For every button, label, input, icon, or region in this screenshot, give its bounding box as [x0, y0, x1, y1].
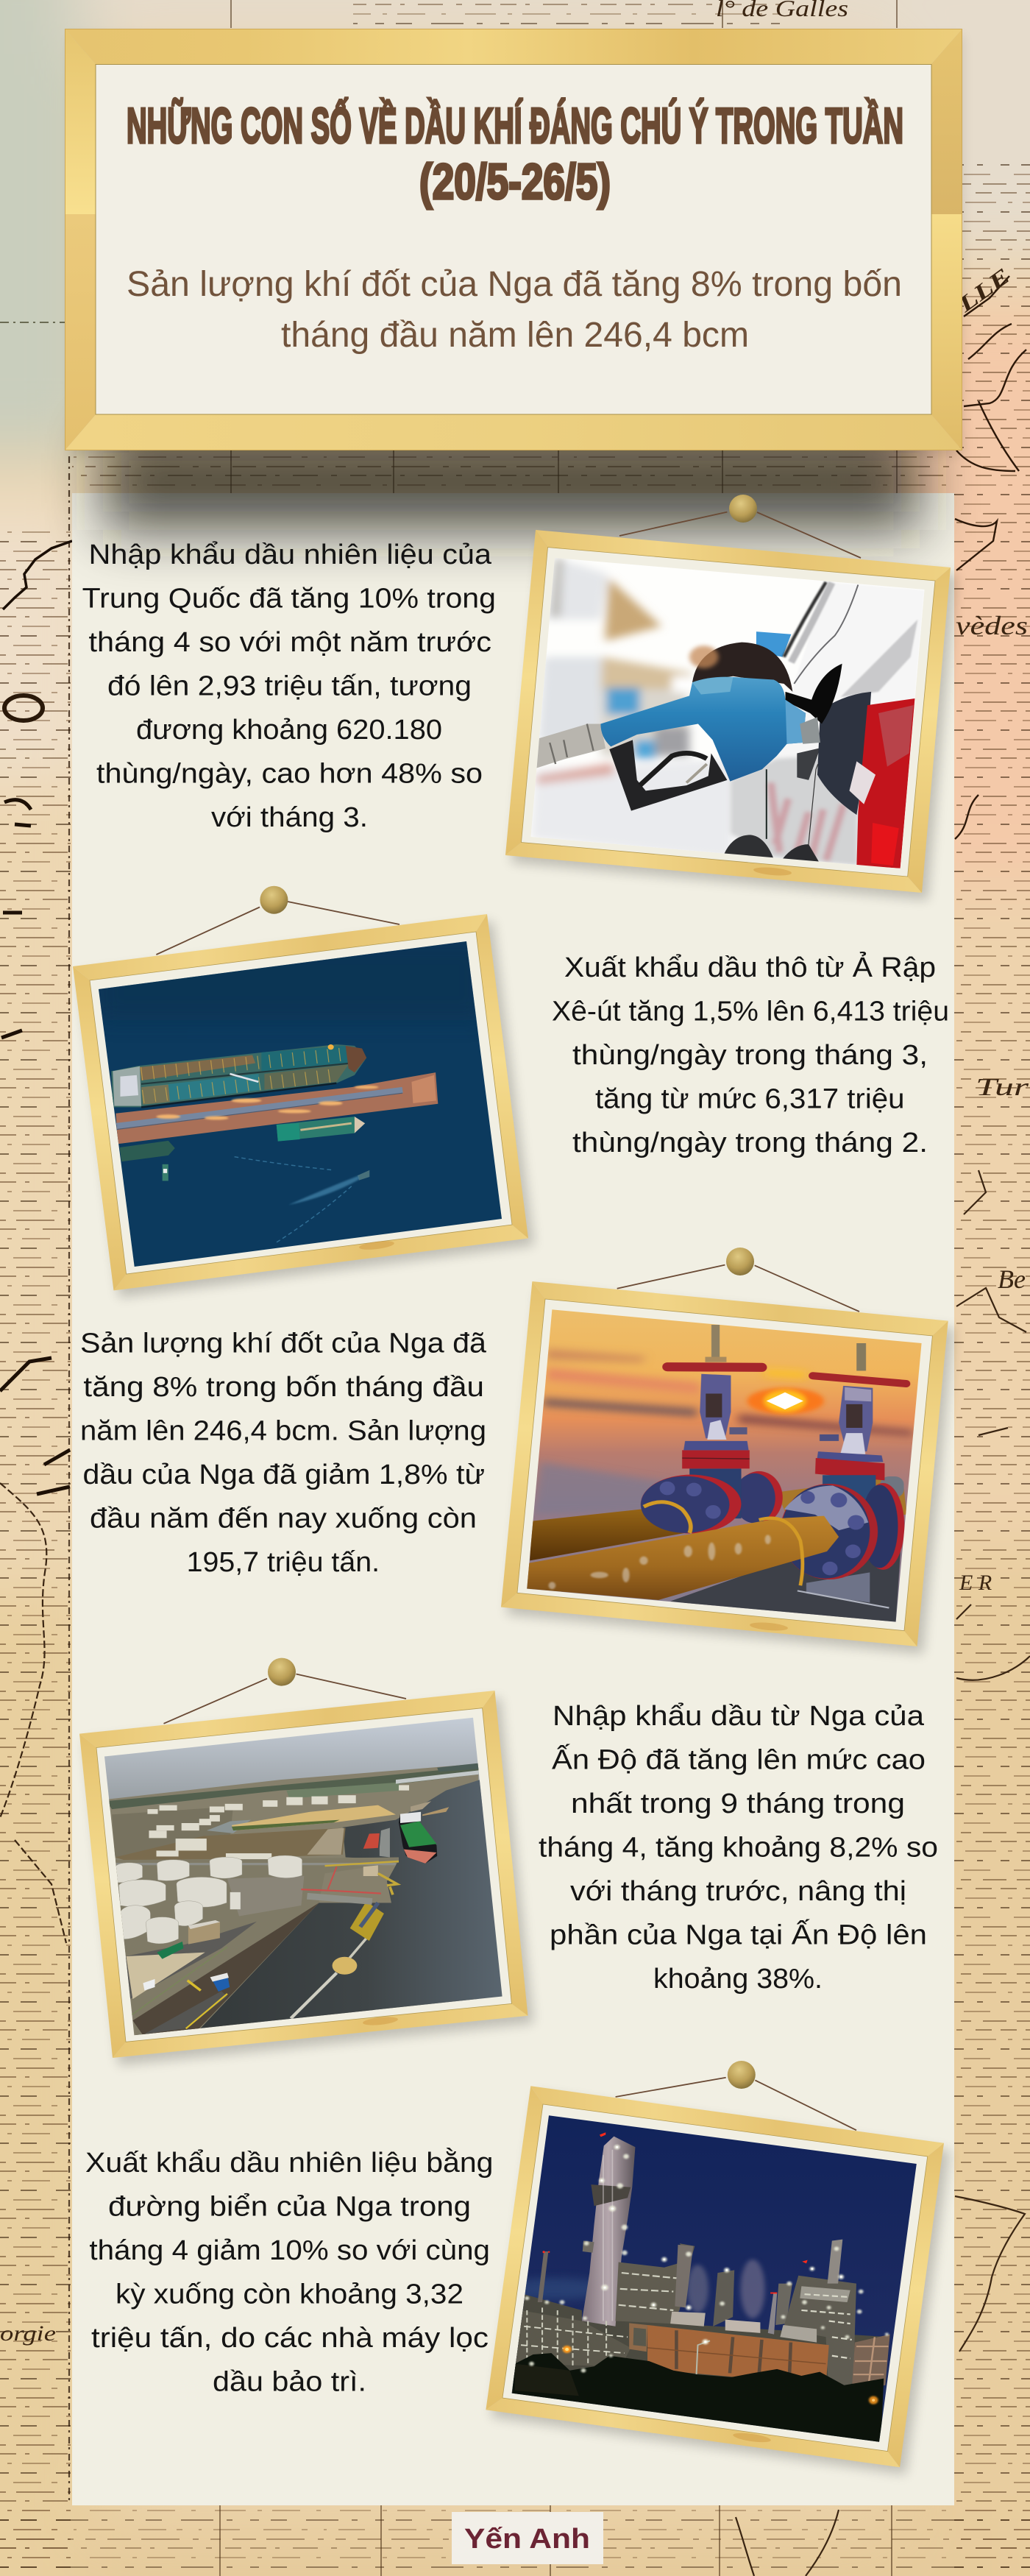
text block 3: Russia gas output: tăng 8% trong bốn tháng đầu	[83, 1372, 484, 1403]
hanging string	[163, 1674, 406, 1724]
title	[127, 97, 903, 210]
text block 4: India imports from Russia: Ấn Độ đã tăng lên mức cao	[552, 1743, 926, 1775]
text block 3: Russia gas output: đầu năm đến nay xuống còn	[90, 1503, 477, 1534]
picture 3: gas pipeline valves at sunset	[501, 1248, 954, 1654]
text block 5: Russia seaborne fuel exports	[85, 2147, 493, 2398]
text block 5: Russia seaborne fuel exports: kỳ xuống còn khoảng 3,32	[116, 2279, 464, 2310]
pin	[268, 1658, 296, 1686]
background: antique map: LLE	[953, 263, 1015, 317]
text block 4: India imports from Russia: với tháng trước, nâng thị	[570, 1876, 906, 1907]
photo: oil terminal	[104, 1718, 502, 2036]
hanging string	[617, 1265, 859, 1312]
photo: fuel nozzle	[531, 558, 924, 868]
pin	[729, 495, 757, 523]
background: antique map: Tur	[976, 1074, 1029, 1101]
text block 1: China fuel imports: thùng/ngày, cao hơn 48% so	[96, 758, 483, 789]
hanging string	[616, 2078, 856, 2130]
hanging string	[619, 512, 861, 558]
text block 5: Russia seaborne fuel exports: Xuất khẩu dầu nhiên liệu bằng	[85, 2147, 493, 2179]
text block 5: Russia seaborne fuel exports: triệu tấn, do các nhà máy lọc	[91, 2323, 489, 2354]
text block 3: Russia gas output	[80, 1328, 487, 1578]
photo: refinery at night	[512, 2115, 917, 2442]
text block 3: Russia gas output: năm lên 246,4 bcm. Sản lượng	[80, 1416, 486, 1447]
text block 1: China fuel imports: Nhập khẩu dầu nhiên liệu của	[88, 539, 492, 570]
picture 4: oil terminal aerial	[79, 1658, 533, 2065]
shadow of title frame	[103, 434, 920, 530]
subtitle: Sản lượng khí đốt của Nga đã tăng 8% trong bốn	[127, 265, 902, 304]
author credit: Yến Anh	[464, 2524, 590, 2555]
pin	[728, 2061, 756, 2089]
author credit	[452, 2512, 603, 2564]
pin	[260, 886, 288, 914]
subtitle: tháng đầu năm lên 246,4 bcm	[281, 316, 749, 355]
background: antique map: vèdes	[956, 611, 1028, 640]
text block 3: Russia gas output: Sản lượng khí đốt của Nga đã	[80, 1328, 487, 1359]
text block 5: Russia seaborne fuel exports: đường biển của Nga trong	[108, 2192, 471, 2223]
title: (20/5-26/5)	[419, 154, 611, 210]
photo: tanker at pier	[99, 941, 502, 1267]
text block 1: China fuel imports: đương khoảng 620.180	[136, 715, 442, 746]
background: antique map: orgie	[0, 2321, 56, 2346]
text block 4: India imports from Russia: Nhập khẩu dầu từ Nga của	[553, 1701, 925, 1732]
background: antique map: Be	[998, 1264, 1026, 1294]
photo: pipeline valves	[527, 1309, 922, 1622]
text block 5: Russia seaborne fuel exports: tháng 4 giảm 10% so với cùng	[89, 2235, 490, 2266]
text block 2: Saudi crude exports: Xê-út tăng 1,5% lên 6,413 triệu	[552, 997, 949, 1027]
text block 1: China fuel imports: với tháng 3.	[211, 802, 368, 833]
text block 1: China fuel imports	[82, 539, 496, 833]
text block 2: Saudi crude exports: thùng/ngày trong tháng 3,	[572, 1040, 928, 1071]
picture 5: refinery at night	[486, 2061, 950, 2474]
text block 2: Saudi crude exports: Xuất khẩu dầu thô từ Ả Rập	[564, 951, 936, 983]
text block 4: India imports from Russia: phần của Nga tại Ấn Độ lên	[550, 1918, 927, 1950]
text block 4: India imports from Russia	[539, 1701, 938, 1995]
text block 1: China fuel imports: tháng 4 so với một năm trước	[88, 627, 491, 658]
text block 3: Russia gas output: 195,7 triệu tấn.	[187, 1547, 380, 1578]
content panel	[72, 493, 954, 2505]
text block 1: China fuel imports: đó lên 2,93 triệu tấn, tương	[107, 671, 472, 702]
background: antique map: E R	[959, 1571, 992, 1595]
text block 4: India imports from Russia: tháng 4, tăng khoảng 8,2% so	[539, 1833, 938, 1864]
subtitle	[127, 265, 902, 355]
picture 2: tanker at pier	[66, 886, 537, 1298]
text block 4: India imports from Russia: khoảng 38%.	[653, 1964, 823, 1995]
text block 2: Saudi crude exports	[552, 951, 949, 1158]
text block 2: Saudi crude exports: tăng từ mức 6,317 triệu	[595, 1083, 905, 1114]
text block 2: Saudi crude exports: thùng/ngày trong tháng 2.	[572, 1128, 928, 1158]
hanging string	[156, 902, 399, 955]
text block 5: Russia seaborne fuel exports: dầu bảo trì.	[213, 2367, 366, 2398]
header frame	[65, 29, 962, 456]
text block 3: Russia gas output: dầu của Nga đã giảm 1,8% từ	[82, 1459, 485, 1490]
text block 4: India imports from Russia: nhất trong 9 tháng trong	[571, 1788, 905, 1819]
picture 1: fuel nozzle in car	[500, 495, 956, 900]
text block 1: China fuel imports: Trung Quốc đã tăng 10% trong	[82, 583, 496, 614]
pin	[726, 1248, 754, 1275]
